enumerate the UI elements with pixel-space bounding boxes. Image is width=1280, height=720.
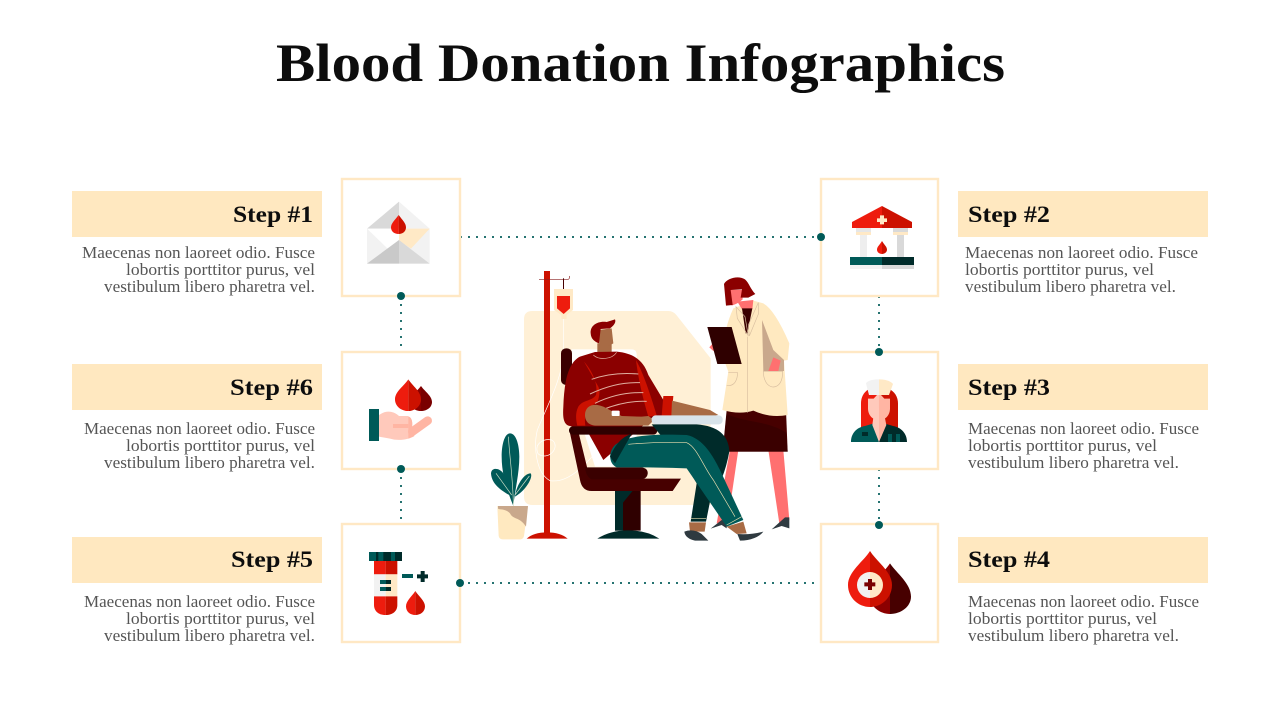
panel: step 1 text — [72, 191, 322, 296]
chair — [561, 348, 681, 539]
panel: step 1 text: lobortis porttitor purus, vel — [126, 260, 315, 279]
panel: step 4 text: lobortis porttitor purus, vel — [968, 609, 1157, 628]
title: Blood Donation Infographics — [276, 33, 1005, 93]
icon box: step 2 blood bank — [821, 179, 938, 296]
panel: step 6 text: vestibulum libero pharetra vel. — [104, 453, 315, 472]
panel: step 5 text: vestibulum libero pharetra vel. — [104, 626, 315, 645]
panel: step 1 text: Step #1 — [233, 202, 313, 228]
panel: step 4 text: vestibulum libero pharetra vel. — [968, 626, 1179, 645]
panel: step 4 text — [958, 537, 1208, 645]
armrest pad and armrest — [569, 415, 723, 435]
donor legs — [610, 424, 763, 541]
donor torso — [563, 319, 718, 460]
panel: step 6 text: Step #6 — [230, 375, 313, 401]
panel: step 3 text — [958, 364, 1208, 472]
panel: step 5 text — [72, 537, 322, 645]
potted plant — [491, 433, 531, 539]
panel: step 2 text: Maecenas non laoreet odio. Fusce — [965, 243, 1198, 262]
panel: step 1 text: vestibulum libero pharetra vel. — [104, 277, 315, 296]
blood bag and tube — [536, 289, 612, 481]
icon box: step 1 envelope — [342, 179, 460, 296]
donor arms — [585, 405, 654, 426]
panel: step 6 text — [72, 364, 322, 472]
background shape — [524, 311, 711, 505]
panel: step 3 text: vestibulum libero pharetra vel. — [968, 453, 1179, 472]
panel: step 2 text: Step #2 — [968, 202, 1050, 228]
panel: step 2 text: lobortis porttitor purus, vel — [965, 260, 1154, 279]
panel: step 6 text: Maecenas non laoreet odio. Fusce — [84, 419, 315, 438]
panel: step 6 text: lobortis porttitor purus, vel — [126, 436, 315, 455]
icon box: step 6 hand with drops — [342, 352, 460, 469]
connector dots — [397, 233, 883, 587]
panel: step 2 text: vestibulum libero pharetra vel. — [965, 277, 1176, 296]
icon box: step 5 test tube — [342, 524, 460, 642]
doctor — [707, 277, 789, 529]
panel: step 3 text: Step #3 — [968, 375, 1050, 401]
panel: step 5 text: lobortis porttitor purus, vel — [126, 609, 315, 628]
panel: step 3 text: lobortis porttitor purus, vel — [968, 436, 1157, 455]
panel: step 3 text: Maecenas non laoreet odio. Fusce — [968, 419, 1199, 438]
iv pole — [527, 271, 570, 539]
panel: step 4 text: Maecenas non laoreet odio. Fusce — [968, 592, 1199, 611]
icon box: step 4 blood drops — [821, 524, 938, 642]
panel: step 4 text: Step #4 — [968, 547, 1050, 573]
icon box: step 3 nurse — [821, 352, 938, 469]
panel: step 5 text: Maecenas non laoreet odio. Fusce — [84, 592, 315, 611]
panel: step 2 text — [958, 191, 1208, 296]
central illustration: donor and doctor — [491, 271, 789, 541]
panel: step 5 text: Step #5 — [231, 547, 313, 573]
panel: step 1 text: Maecenas non laoreet odio. Fusce — [82, 243, 315, 262]
